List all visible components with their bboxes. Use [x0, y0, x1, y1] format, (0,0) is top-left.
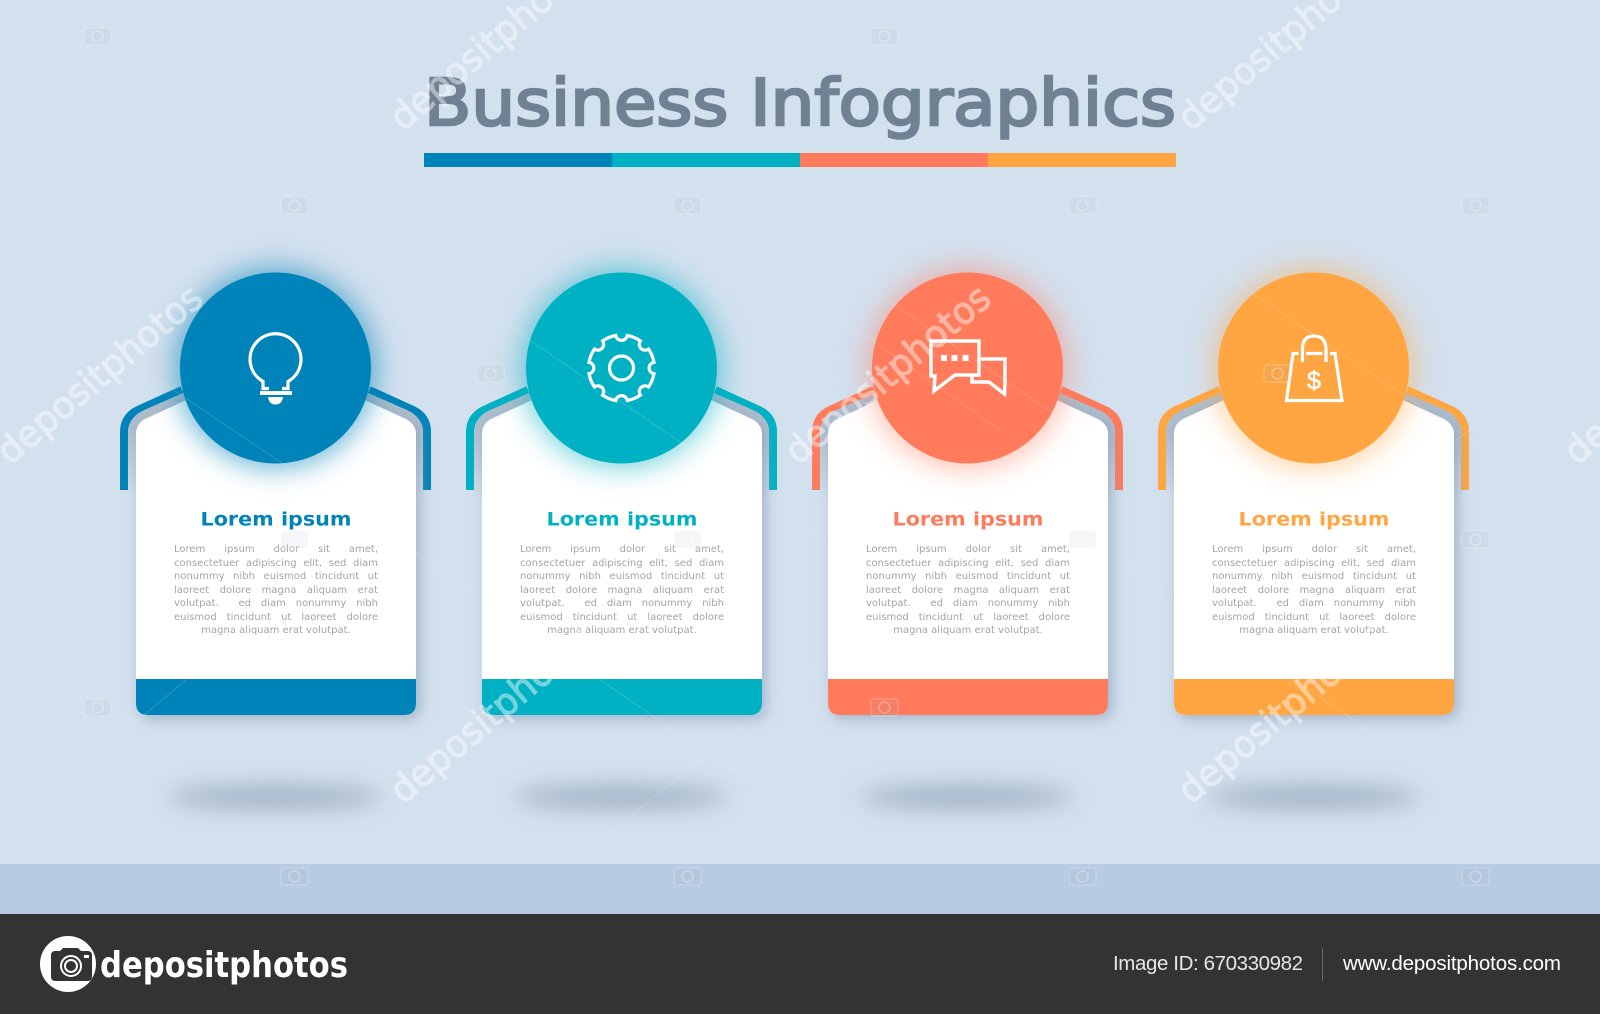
floor shadow 1 [169, 785, 381, 809]
panel: card 1 blue [124, 268, 427, 809]
body text 1: volutpat. ed diam nonummy nibh [174, 598, 378, 609]
footer bar [0, 914, 1600, 1014]
outline bracket 3 [816, 390, 1119, 490]
heading 1: Lorem ipsum [200, 508, 352, 530]
body text 3: Lorem ipsum dolor sit amet, [866, 544, 1070, 555]
footer logo wordmark: depositphotos [100, 945, 348, 986]
image id: Image ID: 670330982 [1113, 952, 1303, 975]
floor shadow 4 [1207, 785, 1419, 809]
inner shadow bracket 4 [1170, 396, 1457, 500]
glow 2 [522, 268, 722, 468]
glow 1 [176, 268, 376, 468]
heading 4: Lorem ipsum [1238, 508, 1390, 530]
body text 3 [866, 543, 1070, 639]
title: Business Infographics [424, 67, 1176, 141]
inner shadow bracket 1 [132, 396, 419, 500]
body text 3: volutpat. ed diam nonummy nibh [866, 598, 1070, 609]
heading 3: Lorem ipsum [892, 508, 1044, 530]
body text 4: consectetuer adipiscing elit, sed diam [1212, 558, 1416, 568]
card body 1 [136, 400, 416, 715]
body text 1: laoreet dolore magna aliquam erat [174, 584, 378, 596]
panel: card 3 coral [816, 268, 1119, 809]
body text 4 [1212, 543, 1416, 639]
circle 4 [1218, 272, 1409, 464]
panel: card 4 orange [1162, 268, 1465, 809]
icon: chat bubbles [931, 341, 1005, 394]
watermark overlay: depositphotos [381, 615, 604, 812]
glow 4 [1214, 268, 1414, 468]
body text 1: magna aliquam erat volutpat. [201, 625, 351, 636]
title underline: four colour bar [424, 153, 1176, 167]
body text 4: Lorem ipsum dolor sit amet, [1212, 544, 1416, 555]
body text 4: magna aliquam erat volutpat. [1239, 625, 1389, 636]
icon: light bulb [250, 334, 301, 404]
inner shadow bracket 2 [478, 396, 765, 500]
watermark overlay: depositphotos [1169, 615, 1392, 812]
website url: www.depositphotos.com [1342, 952, 1561, 975]
body text 1 [174, 543, 378, 639]
body text 2: consectetuer adipiscing elit, sed diam [520, 558, 724, 568]
body text 1: consectetuer adipiscing elit, sed diam [174, 558, 378, 568]
circle 3 [872, 272, 1063, 464]
icon: shopping bag: $ [1307, 367, 1321, 395]
card body 2 [482, 400, 762, 715]
card body 4 [1174, 400, 1454, 715]
heading 2: Lorem ipsum [546, 508, 698, 530]
body text 1: Lorem ipsum dolor sit amet, [174, 544, 378, 555]
watermark overlay: depositphotos [776, 276, 999, 473]
floor shadow 2 [515, 785, 727, 809]
body text 2: laoreet dolore magna aliquam erat [520, 584, 724, 596]
body text 3: nonummy nibh euismod tincidunt ut [866, 571, 1070, 582]
body text 2 [520, 543, 724, 639]
body text 2: magna aliquam erat volutpat. [547, 625, 697, 636]
floor shadow 3 [861, 785, 1073, 809]
body text 3: euismod tincidunt ut laoreet dolore [866, 612, 1070, 622]
body text 2: volutpat. ed diam nonummy nibh [520, 598, 724, 609]
icon: gear [589, 336, 654, 400]
body text 4: euismod tincidunt ut laoreet dolore [1212, 612, 1416, 622]
footer logo icon [40, 936, 96, 992]
card footer band 3 [828, 679, 1108, 715]
outline bracket 4 [1162, 390, 1465, 490]
panel: card 2 teal [470, 268, 773, 809]
inner shadow bracket 3 [824, 396, 1111, 500]
body text 1: euismod tincidunt ut laoreet dolore [174, 612, 378, 622]
body text 3: magna aliquam erat volutpat. [893, 625, 1043, 636]
body text 4: volutpat. ed diam nonummy nibh [1212, 598, 1416, 609]
outline bracket 1 [124, 390, 427, 490]
glow 3 [868, 268, 1068, 468]
body text 2: Lorem ipsum dolor sit amet, [520, 544, 724, 555]
outline bracket 2 [470, 390, 773, 490]
body text 2: euismod tincidunt ut laoreet dolore [520, 612, 724, 622]
body text 3: consectetuer adipiscing elit, sed diam [866, 558, 1070, 568]
card footer band 2 [482, 679, 762, 715]
body text 1: nonummy nibh euismod tincidunt ut [174, 571, 378, 582]
floor band [0, 864, 1600, 914]
body text 3: laoreet dolore magna aliquam erat [866, 584, 1070, 596]
card footer band 4 [1174, 679, 1454, 715]
body text 4: nonummy nibh euismod tincidunt ut [1212, 571, 1416, 582]
icon: shopping bag [1286, 336, 1342, 400]
card body 3 [828, 400, 1108, 715]
footer divider [1322, 948, 1323, 981]
circle 2 [526, 272, 717, 464]
body text 2: nonummy nibh euismod tincidunt ut [520, 571, 724, 582]
body text 4: laoreet dolore magna aliquam erat [1212, 584, 1416, 596]
card footer band 1 [136, 679, 416, 715]
circle 1 [180, 272, 371, 464]
